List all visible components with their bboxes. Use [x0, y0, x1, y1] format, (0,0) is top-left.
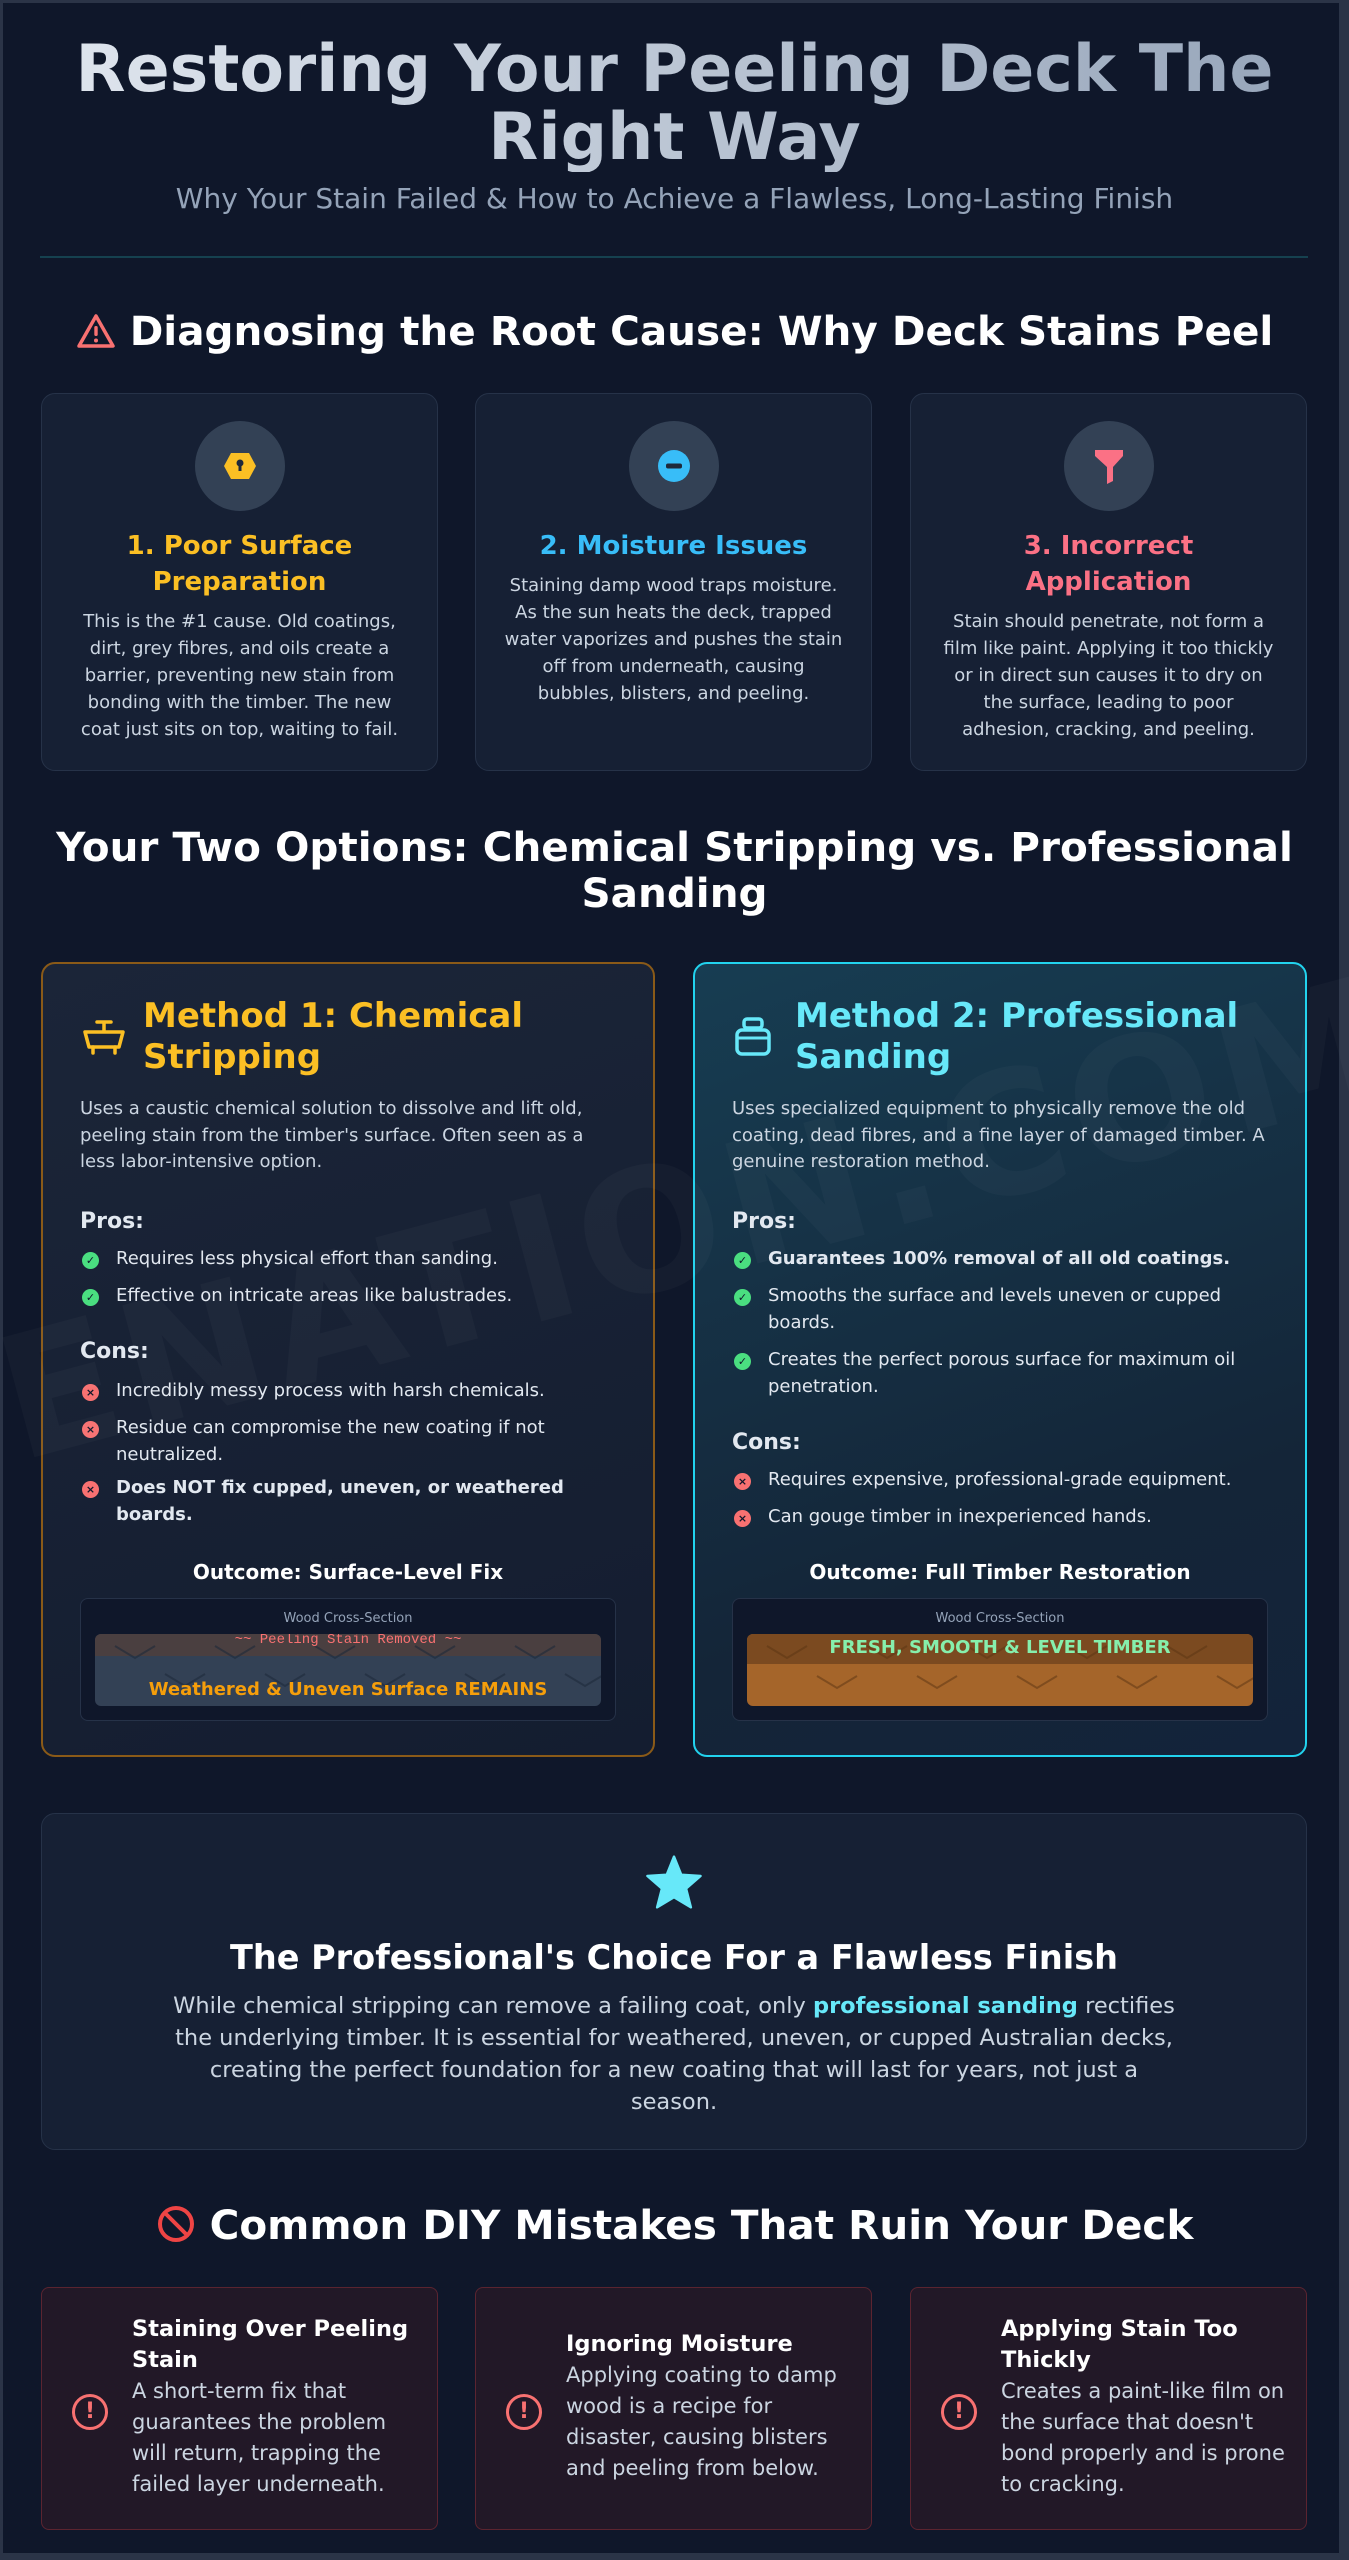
pros list: Creates the perfect porous surface for maximum oil penetration. [768, 1349, 1235, 1396]
method 2 title: Sanding [795, 1037, 951, 1077]
method 1 title: Method 1: Chemical [143, 996, 523, 1036]
heading: two options [56, 823, 1293, 917]
pros heading: Pros: [80, 1209, 144, 1234]
panel: cause 1 [41, 393, 438, 771]
heading: mistakes: Common DIY Mistakes That Ruin Your Deck [210, 2201, 1193, 2249]
icon: alert: ! [519, 2399, 529, 2424]
panel: method 1 [41, 962, 655, 1757]
cause 1 title [127, 531, 352, 597]
mistake 1 text: Staining Over Peeling Stain [132, 2316, 408, 2373]
icon: star [646, 1855, 702, 1909]
heading: diagnosing: Diagnosing the Root Cause: Why Deck Stains Peel [130, 307, 1273, 355]
cause 1 title: Preparation [153, 567, 326, 597]
diagram: wood cross-section 1: Weathered & Uneven Surface REMAINS [149, 1679, 547, 1700]
method 2 title [795, 996, 1238, 1077]
cons list: Incredibly messy process with harsh chemicals. [116, 1380, 545, 1401]
mistake 3 text [1001, 2316, 1285, 2496]
diagram: wood cross-section 1 [80, 1598, 616, 1721]
icon: hexagon [194, 421, 284, 511]
cons heading: Cons: [732, 1430, 801, 1455]
icon: alert: ! [85, 2399, 95, 2424]
method 1 title [143, 996, 523, 1077]
pros list: Requires less physical effort than sanding. [116, 1248, 498, 1269]
callout: professional choice [41, 1813, 1307, 2150]
cause 1 title: 1. Poor Surface [127, 531, 352, 561]
cons list: × [86, 1483, 95, 1496]
outcome label: Outcome: Full Timber Restoration [809, 1560, 1191, 1584]
cause 2 title: 2. Moisture Issues [540, 531, 807, 561]
outcome label: Outcome: Surface-Level Fix [193, 1560, 503, 1584]
cons list: × [738, 1475, 747, 1488]
icon: funnel [1064, 421, 1154, 511]
icon: alert [72, 2394, 108, 2430]
pros list [82, 1248, 512, 1306]
method 1 title: Stripping [143, 1037, 321, 1077]
diagram: wood cross-section 2: FRESH, SMOOTH & LEVEL TIMBER [829, 1637, 1171, 1658]
icon: jar [735, 1017, 771, 1056]
pros list: Guarantees 100% removal of all old coatings. [768, 1248, 1230, 1269]
title: Restoring Your Peeling Deck The [76, 32, 1273, 107]
cause 3 title [1024, 531, 1193, 597]
cons list: × [738, 1512, 747, 1525]
method 1 description: Uses a caustic chemical solution to dissolve and lift old, peeling stain from the timber's surface. Often seen as a less labor-intensive option. [80, 1098, 583, 1172]
mistake 1 text [132, 2316, 408, 2496]
pros list: ✓ [738, 1254, 747, 1267]
mistake 3 text: Applying Stain Too Thickly [1001, 2316, 1238, 2373]
method 2 description: Uses specialized equipment to physically remove the old coating, dead fibres, and a fine layer of damaged timber. A genuine restoration method. [732, 1098, 1265, 1172]
panel: mistake 3 [910, 2287, 1307, 2530]
panel: mistake 1 [41, 2287, 438, 2530]
title [0, 36, 1349, 172]
pros list: Effective on intricate areas like balustrades. [116, 1285, 512, 1306]
icon: bucket [83, 1020, 125, 1055]
cause 3 title: Application [1026, 567, 1191, 597]
mistake 2 text: Ignoring Moisture [566, 2331, 793, 2357]
pros list: Smooths the surface and levels uneven or cupped boards. [768, 1285, 1221, 1332]
cons list: Residue can compromise the new coating if not neutralized. [116, 1417, 545, 1464]
pros list: ✓ [86, 1254, 95, 1267]
callout text: While chemical stripping can remove a failing coat, only professional sanding rectifies the underlying timber. It is essential for weathered, uneven, or cupped Australian decks, creating the perfect foundation for a new coating that will last for years, not just a season. [173, 1993, 1175, 2115]
cons list: Can gouge timber in inexperienced hands. [768, 1506, 1152, 1527]
diagram: wood cross-section 1: Wood Cross-Section [283, 1611, 412, 1626]
cause 2 text: Staining damp wood traps moisture. As the sun heats the deck, trapped water vaporizes and pushes the stain off from underneath, causing bubbles, blisters, and peeling. [505, 575, 842, 704]
pros list: ✓ [86, 1291, 95, 1304]
cons list [734, 1469, 1231, 1527]
icon: alert [941, 2394, 977, 2430]
cons list: × [86, 1423, 95, 1436]
method 2 title: Method 2: Professional [795, 996, 1238, 1036]
pros list: ✓ [738, 1355, 747, 1368]
icon: alert: ! [954, 2399, 964, 2424]
callout title: The Professional's Choice For a Flawless Finish [230, 1938, 1118, 1977]
panel: mistake 2 [475, 2287, 872, 2530]
mistake 2 text: Applying coating to damp wood is a recipe for disaster, causing blisters and peeling from below. [566, 2363, 837, 2480]
pros heading: Pros: [732, 1209, 796, 1234]
cons list: Does NOT fix cupped, uneven, or weathered boards. [116, 1477, 564, 1524]
subtitle: Why Your Stain Failed & How to Achieve a Flawless, Long-Lasting Finish [176, 182, 1173, 215]
icon: minus circle [628, 421, 718, 511]
diagram: wood cross-section 2: Wood Cross-Section [935, 1611, 1064, 1626]
icon: alert [506, 2394, 542, 2430]
diagram: wood cross-section 2 [732, 1598, 1268, 1721]
cause 1 text: This is the #1 cause. Old coatings, dirt, grey fibres, and oils create a barrier, preventing new stain from bonding with the timber. The new coat just sits on top, waiting to fail. [81, 611, 398, 740]
panel: cause 2 [475, 393, 872, 771]
cons list: Requires expensive, professional-grade equipment. [768, 1469, 1231, 1490]
heading: two options: Your Two Options: Chemical Stripping vs. Professional [56, 823, 1293, 871]
panel: cause 3 [910, 393, 1307, 771]
cons list: × [86, 1386, 95, 1399]
mistake 1 text: A short-term fix that guarantees the problem will return, trapping the failed layer underneath. [132, 2379, 386, 2496]
panel: method 2 [693, 962, 1307, 1757]
cause 3 title: 3. Incorrect [1024, 531, 1193, 561]
cause 3 text: Stain should penetrate, not form a film like paint. Applying it too thickly or in direct sun causes it to dry on the surface, leading to poor adhesion, cracking, and peeling. [944, 611, 1273, 740]
mistake 3 text: Creates a paint-like film on the surface that doesn't bond properly and is prone to cracking. [1001, 2379, 1285, 2496]
pros list: ✓ [738, 1291, 747, 1304]
cons list [82, 1380, 564, 1524]
heading: two options: Sanding [581, 869, 768, 917]
pros list [734, 1248, 1235, 1396]
title: Right Way [488, 100, 861, 175]
cons heading: Cons: [80, 1339, 149, 1364]
